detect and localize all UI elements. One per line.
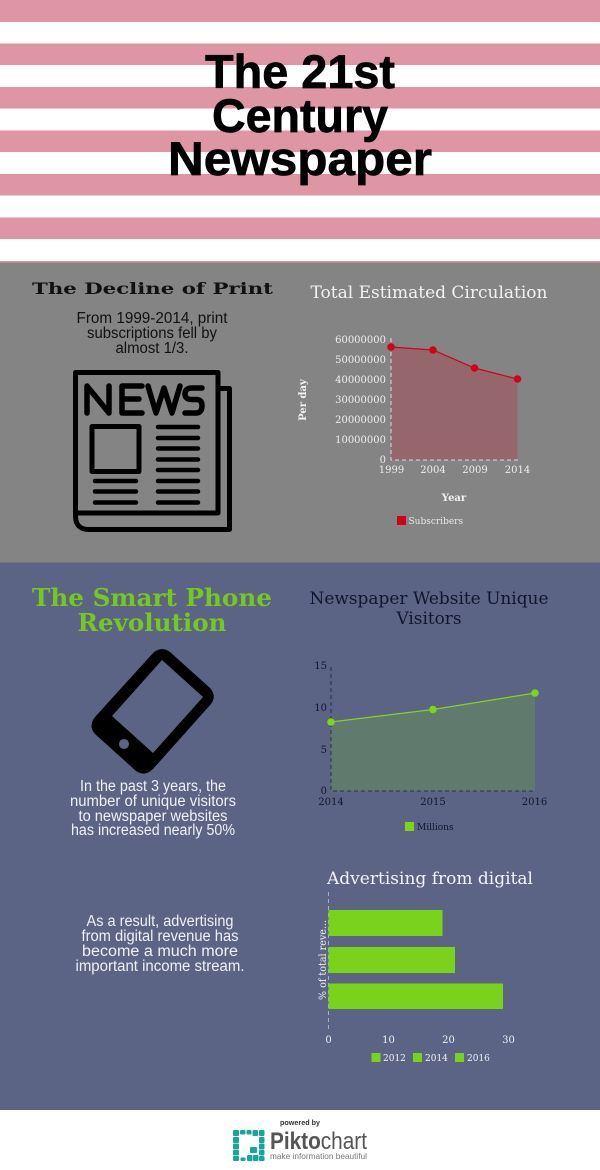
y axis labels: 10000000: [335, 435, 386, 446]
area and line: [327, 667, 539, 791]
x axis labels: [379, 465, 530, 476]
legend: 2014: [425, 1054, 448, 1064]
bars: [328, 892, 503, 1030]
footer: piktochart branding: [233, 1120, 367, 1161]
x axis labels: 20: [442, 1035, 455, 1046]
text block: advertising result: important income stream.: [76, 958, 244, 975]
text block: print subscriptions: [76, 310, 228, 357]
x axis labels: [318, 797, 547, 808]
heading: the smart phone revolution: Revolution: [78, 608, 226, 637]
y axis title: Per day: [298, 378, 309, 421]
y axis labels: 5: [321, 745, 327, 756]
y axis labels: 60000000: [335, 335, 386, 346]
chart title: Advertising from digital: [326, 869, 533, 889]
chart title: Newspaper Website Unique: [310, 589, 548, 609]
tagline: make information beautiful: [270, 1151, 367, 1161]
legend: [405, 822, 454, 833]
x axis labels: [325, 1035, 515, 1046]
y axis labels: [335, 335, 386, 466]
text block: print subscriptions: almost 1/3.: [116, 340, 188, 357]
legend: Millions: [417, 823, 454, 833]
text block: advertising result: become a much more: [82, 943, 238, 960]
text block: print subscriptions: From 1999-2014, print: [76, 310, 228, 327]
x axis labels: 30: [502, 1035, 515, 1046]
x axis labels: 10: [382, 1035, 395, 1046]
chart title: [310, 589, 548, 629]
icon: piktochart logo: [233, 1130, 264, 1161]
x axis labels: 2014: [505, 465, 530, 476]
heading: the smart phone revolution: The Smart Phone: [32, 583, 272, 612]
title: [168, 45, 432, 185]
text block: unique visitors: [70, 778, 236, 839]
text block: advertising result: As a result, advertising: [86, 913, 234, 930]
y axis labels: 0: [321, 786, 327, 797]
text block: unique visitors: In the past 3 years, the: [80, 778, 226, 795]
legend: 2012: [383, 1054, 406, 1064]
x axis title: Year: [441, 493, 467, 504]
chart: total estimated circulation: [298, 283, 548, 527]
panel: striped title header: [0, 0, 600, 262]
panel: the decline of print: [0, 262, 600, 562]
icon: smartphone: [92, 649, 214, 774]
text block: unique visitors: number of unique visitors: [70, 793, 236, 810]
heading: the decline of print: The Decline of Print: [32, 279, 274, 298]
chart: newspaper website unique visitors: [310, 589, 548, 833]
chart: advertising from digital: [318, 869, 533, 1064]
y axis labels: 0: [380, 455, 386, 466]
y axis labels: 40000000: [335, 375, 386, 386]
x axis labels: 1999: [379, 465, 404, 476]
wordmark: Piktochart: [270, 1128, 367, 1155]
title: The 21st: [205, 45, 395, 98]
title: Century: [212, 89, 388, 142]
chart title: Visitors: [396, 609, 462, 629]
x axis labels: 2004: [420, 465, 446, 476]
icon: newspaper: [76, 372, 230, 530]
title: Newspaper: [168, 132, 432, 185]
area and line: [387, 338, 521, 460]
y axis labels: 20000000: [335, 415, 386, 426]
heading: the smart phone revolution: [32, 583, 272, 637]
x axis labels: 2016: [522, 797, 547, 808]
y axis labels: 30000000: [335, 395, 386, 406]
legend: Subscribers: [408, 517, 463, 527]
text block: unique visitors: has increased nearly 50%: [71, 822, 235, 839]
x axis labels: 2015: [420, 797, 446, 808]
x axis labels: 2009: [462, 465, 488, 476]
text block: advertising result: from digital revenue has: [82, 928, 239, 945]
y axis labels: 10: [314, 703, 327, 714]
text block: unique visitors: to newspaper websites: [78, 808, 228, 825]
y axis labels: 50000000: [335, 355, 386, 366]
legend: 2016: [467, 1054, 490, 1064]
panel: the smart phone revolution: [0, 562, 600, 1110]
chart title: Total Estimated Circulation: [310, 283, 548, 303]
y axis title: % of total reve...: [318, 920, 329, 1000]
powered by: powered by: [280, 1120, 320, 1127]
x axis labels: 0: [325, 1035, 332, 1046]
text block: print subscriptions: subscriptions fell by: [87, 325, 217, 342]
x axis labels: 2014: [318, 797, 344, 808]
text block: advertising result: [76, 913, 244, 975]
y axis labels: [314, 661, 327, 797]
y axis labels: 15: [314, 661, 327, 672]
legend: [372, 1053, 490, 1064]
